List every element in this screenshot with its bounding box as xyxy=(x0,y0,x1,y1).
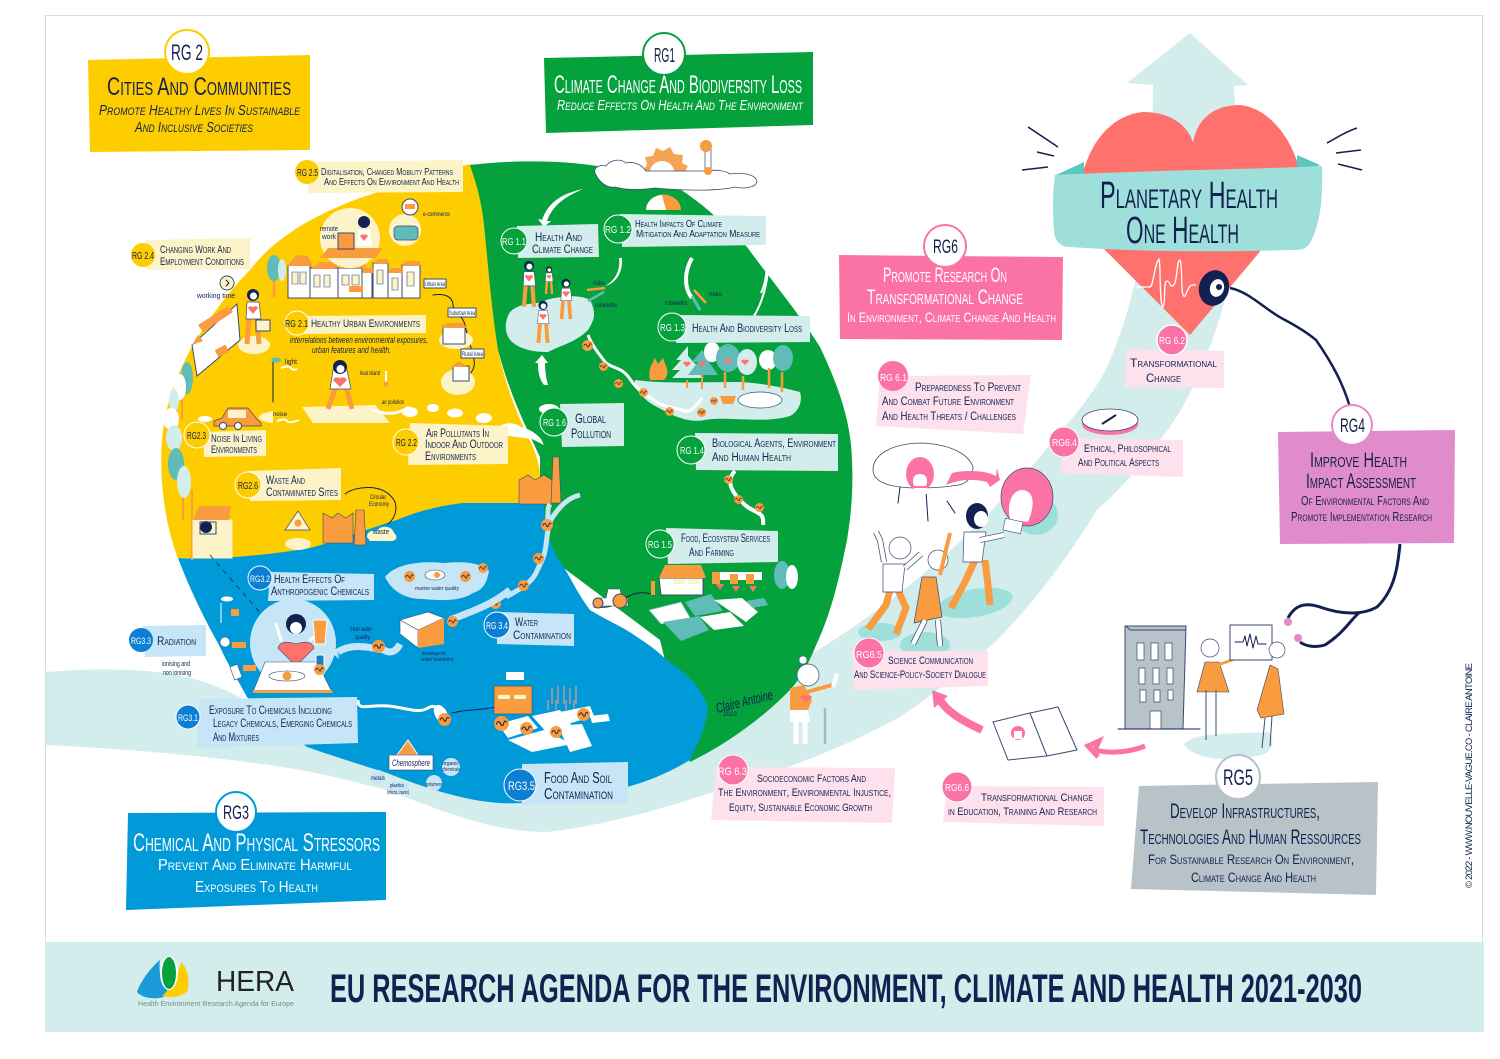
arrow: risks and cobenefits for RG 1.1: cobenefits xyxy=(595,303,617,309)
label: RG 6.3: Equity, Sustainable Economic Growth xyxy=(729,802,872,814)
panel: circle, chemicals blue sector xyxy=(178,503,708,803)
illustration: e-commerce circle: e-commerce xyxy=(423,211,450,218)
illustration: circular economy factory and waste: waste xyxy=(372,529,389,536)
panel: RG4 health impact assessment: Improve Health xyxy=(1310,449,1407,472)
illustration: chemosphere sign and substances: polymers xyxy=(426,782,442,788)
label: RG 2.6: RG2.6 xyxy=(238,481,258,492)
panel: RG2 cities and communities: Cities And Communities xyxy=(107,73,291,101)
arrow: risks and cobenefits for RG 1.3: risks xyxy=(709,292,722,298)
panel: RG5 infrastructures and technologies xyxy=(1131,755,1378,895)
icon: stethoscope ear tubes xyxy=(1284,544,1400,646)
illustration: heat island and air pollution: air pollution xyxy=(382,400,404,406)
illustration: circular economy factory and waste: Circular xyxy=(370,494,387,501)
illustration: remote work circle: work xyxy=(321,234,336,241)
illustration: commuter with briefcase xyxy=(238,289,270,354)
label: RG 6.5: RG6.5 xyxy=(856,649,882,661)
label: RG 2.1: Healthy Urban Environments xyxy=(311,318,420,330)
label: RG 3.5: Contamination xyxy=(544,786,613,803)
illustration: fresh water and treatment unit: water treatment xyxy=(420,657,453,663)
illustration: elderly woman with cane xyxy=(790,656,837,744)
label: RG 2.1: interrelations between environmental exposures, xyxy=(290,335,428,345)
label: RG 6.6 xyxy=(942,772,1104,826)
label: RG 2.2 xyxy=(393,423,508,465)
illustration: heart top xyxy=(1083,105,1299,200)
ribbon arrow: transformational pathway xyxy=(46,33,1248,832)
illustration: people on climate blob xyxy=(506,261,594,352)
label: RG 6.1: And Combat Future Environment xyxy=(882,394,1014,408)
label: RG 1.1 xyxy=(501,224,599,258)
illustration: dashed link from house xyxy=(210,555,262,615)
label: RG 6.2 xyxy=(1125,325,1224,388)
label: RG 2.3: Environments xyxy=(211,444,257,456)
label: RG 3.4: Water xyxy=(515,615,538,629)
illustration: hazard sign xyxy=(285,511,311,550)
label: RG 2.6: Contaminated Sites xyxy=(266,485,338,499)
illustration: radiation sources xyxy=(220,596,256,680)
label: RG 2.1: RG 2.1 xyxy=(285,319,308,330)
label: RG 3.3: RG3.3 xyxy=(131,636,151,647)
label: RG 2.5: Digitalisation, Changed Mobility Patterns xyxy=(321,167,453,178)
panel: RG3 chemical and physical stressors: Exposures To Health xyxy=(195,879,318,896)
illustration: walking woman on street xyxy=(302,360,390,423)
icon: radiating lines right xyxy=(1327,128,1362,170)
label: RG 1.4: Biological Agents, Environment xyxy=(712,438,836,450)
icon: heartbeat line xyxy=(1136,259,1196,307)
panel: RG5 infrastructures and technologies: For Sustainable Research On Environment, xyxy=(1148,852,1354,867)
label: RG 2.6: Waste And xyxy=(266,473,305,487)
illustration: farm with tractor, barn, cows and fields xyxy=(593,561,798,641)
label: RG 2.6 xyxy=(235,468,341,501)
illustration: team carrying the idea xyxy=(858,503,1015,658)
illustration: smog clouds xyxy=(402,404,492,423)
panel: RG5 infrastructures and technologies: Develop Infrastructures, xyxy=(1170,800,1320,823)
label: RG 6.6: Transformational Change xyxy=(981,792,1093,804)
arrow: risks and cobenefits for RG 1.1: risks xyxy=(593,281,605,287)
label: RG 2.4: Changing Work And xyxy=(160,244,231,256)
label: RG 1.5: RG 1.5 xyxy=(648,540,672,551)
arrow: bubble to lightbulb xyxy=(946,468,1000,487)
label: RG 3.4: RG 3.4 xyxy=(486,621,508,632)
label: RG 6.6: RG6.6 xyxy=(945,783,969,794)
icon: compass xyxy=(1082,409,1138,435)
label: RG 3.1: And Mixtures xyxy=(213,732,259,744)
illustration: chemosphere sign and substances xyxy=(371,740,460,796)
panel: bottom title band xyxy=(45,942,1484,1032)
label: RG 2.5: RG 2.5 xyxy=(297,168,318,179)
label: RG 6.4 xyxy=(1049,427,1183,477)
panel: RG4 health impact assessment xyxy=(1278,405,1455,544)
panel: planetary health band: One Health xyxy=(1126,210,1239,252)
illustration: urban, suburban and rural area signs: Suburban Area xyxy=(449,311,475,317)
illustration: workplace building xyxy=(192,304,240,376)
text: ionising note: ionising and xyxy=(162,661,190,668)
arrowhead xyxy=(932,690,948,708)
panel: RG2 cities and communities: And Inclusive Societies xyxy=(134,119,253,136)
illustration: cloud, sun and thermometer xyxy=(595,140,757,190)
arrow: researchers to book xyxy=(1088,741,1145,757)
panel: RG6 transformational change: Promote Research On xyxy=(883,264,1007,287)
icon: large lightbulb xyxy=(1001,468,1058,535)
label: RG 3.4: Contamination xyxy=(513,628,571,642)
label: RG 1.5: Food, Ecosystem Services xyxy=(681,533,770,545)
label: RG 6.1: Preparedness To Prevent xyxy=(915,380,1021,394)
panel: RG4 health impact assessment: RG4 xyxy=(1340,416,1365,437)
panel: RG6 transformational change: Transformational Change xyxy=(867,286,1023,309)
label: RG 3.5: Food And Soil xyxy=(544,770,612,787)
icon: stethoscope tube to assessment xyxy=(1230,288,1352,415)
label: RG 6.1: And Health Threats / Challenges xyxy=(882,409,1016,423)
label: RG 3.1: Exposure To Chemicals Including xyxy=(209,705,332,717)
label: RG 3.5: RG3.5 xyxy=(508,779,535,793)
label: RG 2.3 xyxy=(184,422,266,457)
label: RG 6.5: Science Communication xyxy=(888,655,973,667)
label: RG 2.1: urban features and health. xyxy=(312,345,391,355)
label: RG 6.4: RG6.4 xyxy=(1052,438,1077,449)
panel: planetary health band xyxy=(1053,166,1322,252)
label: RG 2.3: RG2.3 xyxy=(187,431,206,442)
label: RG 2.5 xyxy=(295,160,463,193)
illustration: house with person in window xyxy=(193,506,232,558)
label: RG 6.1: RG 6.1 xyxy=(880,373,907,384)
icon: stethoscope chest piece xyxy=(1195,267,1233,309)
signature year: 2022 xyxy=(723,711,737,718)
label: RG 1.6: RG 1.6 xyxy=(543,418,566,429)
label: RG 2.1 xyxy=(285,311,428,355)
panel: circle, cities yellow sector xyxy=(161,164,541,560)
illustration: street light: light xyxy=(285,359,297,366)
text: ionising note: non ionising xyxy=(163,670,191,677)
illustration: marine water lake: marine water quality xyxy=(415,586,459,592)
label: RG 1.6: Pollution xyxy=(571,425,611,441)
label: RG 1.2: RG 1.2 xyxy=(605,225,631,236)
label: RG 3.2 xyxy=(248,566,374,601)
illustration: chemosphere sign and substances: plastics xyxy=(390,783,404,789)
panel: RG5 infrastructures and technologies: Technologies And Human Ressources xyxy=(1140,826,1361,849)
label: RG 2.4: Employment Conditions xyxy=(160,256,244,268)
illustration: stream to RG 3.1 xyxy=(358,700,496,726)
logo: HERA xyxy=(137,956,295,1008)
label: RG 6.4: Ethical, Philosophical xyxy=(1084,443,1171,455)
illustration: row of houses xyxy=(287,255,420,298)
label: RG 6.3: Socioeconomic Factors And xyxy=(757,773,866,785)
panel: RG3 chemical and physical stressors: Prevent And Eliminate Harmful xyxy=(158,857,352,874)
panel: RG2 cities and communities xyxy=(88,30,310,152)
illustration: street light xyxy=(271,358,297,402)
label: RG 6.2: Change xyxy=(1146,371,1181,385)
arrow: sun to RG 1.1 xyxy=(538,189,583,227)
illustration: chemosphere sign and substances: organic xyxy=(442,761,459,767)
illustration: car and noise xyxy=(198,408,299,430)
label: RG 1.4: RG 1.4 xyxy=(680,446,704,457)
label: RG 3.3: Radiation xyxy=(157,634,196,648)
illustration: waterfall stream from factory to sea xyxy=(490,495,580,609)
arrow: risks and cobenefits for RG 1.1 xyxy=(587,258,622,309)
illustration: pollutant path through green xyxy=(582,335,718,417)
illustration: remote work circle xyxy=(320,208,382,268)
label: RG 1.2 xyxy=(604,214,766,247)
illustration: car and noise: noise xyxy=(273,411,287,418)
panel: RG2 cities and communities: RG 2 xyxy=(171,40,203,65)
label: RG 6.5: And Science-Policy-Society Dialogue xyxy=(854,669,986,681)
label: RG 3.4 xyxy=(484,612,574,646)
label: RG 3.2: RG3.2 xyxy=(250,574,270,585)
panel: RG3 chemical and physical stressors: RG3 xyxy=(223,803,249,824)
illustration: fresh water and treatment unit: fresh water xyxy=(350,627,372,633)
arrow: risks and cobenefits for RG 1.3: cobenefits xyxy=(665,301,687,307)
illustration: trees along yellow edge xyxy=(163,362,193,560)
label: RG 3.2: Health Effects Of xyxy=(274,572,345,586)
illustration: biological path from RG 1.4 to RG 1.5 xyxy=(724,471,764,525)
panel: RG1 climate change and biodiversity loss xyxy=(544,33,813,133)
illustration: biodiversity blob with trees, fire and pond xyxy=(635,342,801,421)
panel: RG1 climate change and biodiversity loss: Climate Change And Biodiversity Loss xyxy=(554,71,802,99)
panel: RG3 chemical and physical stressors: Chemical And Physical Stressors xyxy=(133,829,380,857)
panel: RG3 chemical and physical stressors xyxy=(126,792,386,910)
icon: ribbon dark folds xyxy=(1056,155,1320,180)
label: RG 1.2: Health Impacts Of Climate xyxy=(635,218,722,230)
label: RG 3.5 xyxy=(504,762,628,805)
label: RG 1.3 xyxy=(658,313,810,343)
arrow: book to science communication xyxy=(938,696,982,730)
illustration: working time clock: working time xyxy=(196,293,235,300)
label: RG 2.2: Indoor And Outdoor xyxy=(425,437,503,451)
illustration: contaminated fields and grain xyxy=(494,672,610,752)
illustration: heat island and air pollution xyxy=(360,371,409,413)
label: RG 1.6: Global xyxy=(575,410,606,426)
label: RG 6.2: Transformational xyxy=(1130,356,1218,370)
panel: RG6 transformational change: RG6 xyxy=(933,237,958,258)
panel: RG6 transformational change xyxy=(839,225,1063,340)
label: RG 1.5 xyxy=(646,528,778,564)
panel: RG6 transformational change: In Environment, Climate Change And Health xyxy=(847,309,1056,325)
label: RG 6.3 xyxy=(711,755,895,823)
label: RG 1.1: Health And xyxy=(535,230,582,244)
panel: RG2 cities and communities: Promote Healthy Lives In Sustainable xyxy=(99,102,301,119)
illustration: temperature gauge xyxy=(646,195,681,210)
icon: open book xyxy=(993,707,1077,760)
label: RG 6.6: in Education, Training And Research xyxy=(948,806,1097,818)
illustration: remote work circle: remote xyxy=(320,226,338,233)
label: RG 1.1: RG 1.1 xyxy=(502,237,526,248)
illustration: marine water lake xyxy=(385,562,489,600)
illustration: building, researchers and screen xyxy=(1118,625,1285,759)
label: RG 2.2: RG 2.2 xyxy=(396,438,417,449)
panel: RG1 climate change and biodiversity loss: Reduce Effects On Health And The Environment xyxy=(557,97,804,114)
icon: heart lower part xyxy=(1103,248,1263,335)
label: RG 2.4 xyxy=(131,238,250,270)
label: RG 3.1 xyxy=(176,697,358,748)
label: RG 1.3: Health And Biodiversity Loss xyxy=(692,321,802,335)
label: RG 1.5: And Farming xyxy=(689,547,734,559)
illustration: chemosphere sign and substances: (micro, nano) xyxy=(387,790,409,796)
illustration: e-commerce circle xyxy=(389,199,450,246)
label: RG 3.2: Anthropogenic Chemicals xyxy=(271,584,369,598)
label: RG 2.2: Environments xyxy=(425,449,476,463)
illustration: speech bubble with lightbulb xyxy=(873,443,973,521)
illustration: fresh water and treatment unit: quality xyxy=(355,635,370,641)
panel: planetary health band: Planetary Health xyxy=(1100,175,1278,217)
label: RG 6.3: RG 6.3 xyxy=(718,766,747,778)
label: RG 2.3: Noise In Living xyxy=(211,433,262,445)
label: RG 6.1 xyxy=(876,361,1031,434)
label: RG 3.3 xyxy=(129,625,206,657)
label: RG 6.4: And Political Aspects xyxy=(1078,457,1159,469)
label: RG 1.1: Climate Change xyxy=(532,242,593,256)
illustration: urban, suburban and rural area signs xyxy=(424,279,484,395)
logo: HERA: Health Environment Research Agenda for Europe xyxy=(138,1001,294,1008)
arrow: risks and cobenefits for RG 1.3 xyxy=(665,258,722,310)
illustration: chemosphere sign and substances: chemicals xyxy=(442,767,460,773)
illustration: chemosphere sign and substances: metals xyxy=(371,776,385,782)
label: RG 6.3: The Environment, Environmental Injustice, xyxy=(718,787,891,799)
icon: radiating lines left xyxy=(1022,127,1058,170)
signature: Claire Antoine xyxy=(714,686,774,716)
illustration: working time clock xyxy=(196,276,235,300)
panel: RG4 health impact assessment: Promote Implementation Research xyxy=(1291,509,1432,524)
label: RG 2.5: And Effects On Environment And Health xyxy=(324,177,459,188)
panel: RG5 infrastructures and technologies: Climate Change And Health xyxy=(1191,870,1316,885)
illustration: woman at table surrounded by exposures xyxy=(250,599,336,693)
illustration: fresh water and treatment unit: technologies for xyxy=(422,651,446,657)
arrow: pollution to people xyxy=(535,355,548,385)
text: credit: © 2022 - WWW.NOUVELLE-VAGUE.CO - CLAIRE ANTOINE xyxy=(1464,663,1475,888)
illustration: circular economy factory and waste xyxy=(323,487,396,545)
label: RG 1.6 xyxy=(540,403,624,447)
panel: RG5 infrastructures and technologies: RG5 xyxy=(1223,765,1253,790)
illustration: fresh water and treatment unit xyxy=(332,590,510,663)
illustration: tree xyxy=(267,255,286,297)
label: RG 1.4: And Human Health xyxy=(712,452,791,464)
panel: RG4 health impact assessment: Of Environmental Factors And xyxy=(1301,493,1429,508)
label: RG 2.4: RG 2.4 xyxy=(132,251,154,262)
label: RG 3.1: RG3.1 xyxy=(178,713,198,724)
label: RG 2.2: Air Pollutants In xyxy=(426,426,489,440)
label: RG 1.4 xyxy=(677,433,838,471)
illustration: heat island and air pollution: heat island xyxy=(360,371,380,377)
text: ionising note xyxy=(162,661,191,677)
illustration: circular economy factory and waste: Economy xyxy=(369,501,390,508)
arrow: heat to RG 1.3 xyxy=(748,208,768,318)
illustration: urban, suburban and rural area signs: Urban Area xyxy=(425,282,445,288)
label: RG 6.5 xyxy=(852,638,988,690)
label: RG 6.2: RG 6.2 xyxy=(1159,336,1185,347)
logo: HERA: HERA xyxy=(216,966,295,998)
panel: circle, climate green sector xyxy=(470,161,852,762)
label: RG 3.1: Legacy Chemicals, Emerging Chemicals xyxy=(213,718,352,730)
illustration: chemosphere sign and substances: Chemosphere xyxy=(392,758,430,768)
label: RG 1.3: RG 1.3 xyxy=(660,323,685,334)
illustration: pollution factory with smoke xyxy=(476,404,561,504)
panel: RG4 health impact assessment: Impact Assessment xyxy=(1306,470,1416,493)
illustration: urban, suburban and rural area signs: Rural Area xyxy=(462,352,483,358)
panel: RG1 climate change and biodiversity loss: RG1 xyxy=(654,45,675,67)
label: RG 1.2: Mitigation And Adaptation Measure xyxy=(636,228,760,240)
